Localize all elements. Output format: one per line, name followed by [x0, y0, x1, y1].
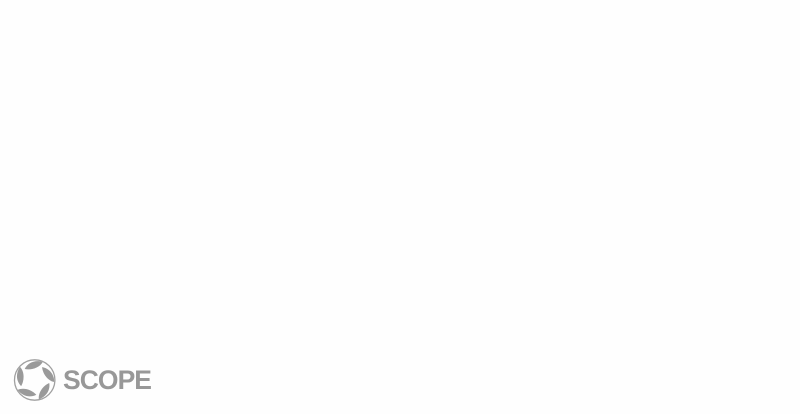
icon: Scope logo ring	[14, 359, 56, 401]
logo wordmark: SCOPE	[63, 365, 151, 395]
